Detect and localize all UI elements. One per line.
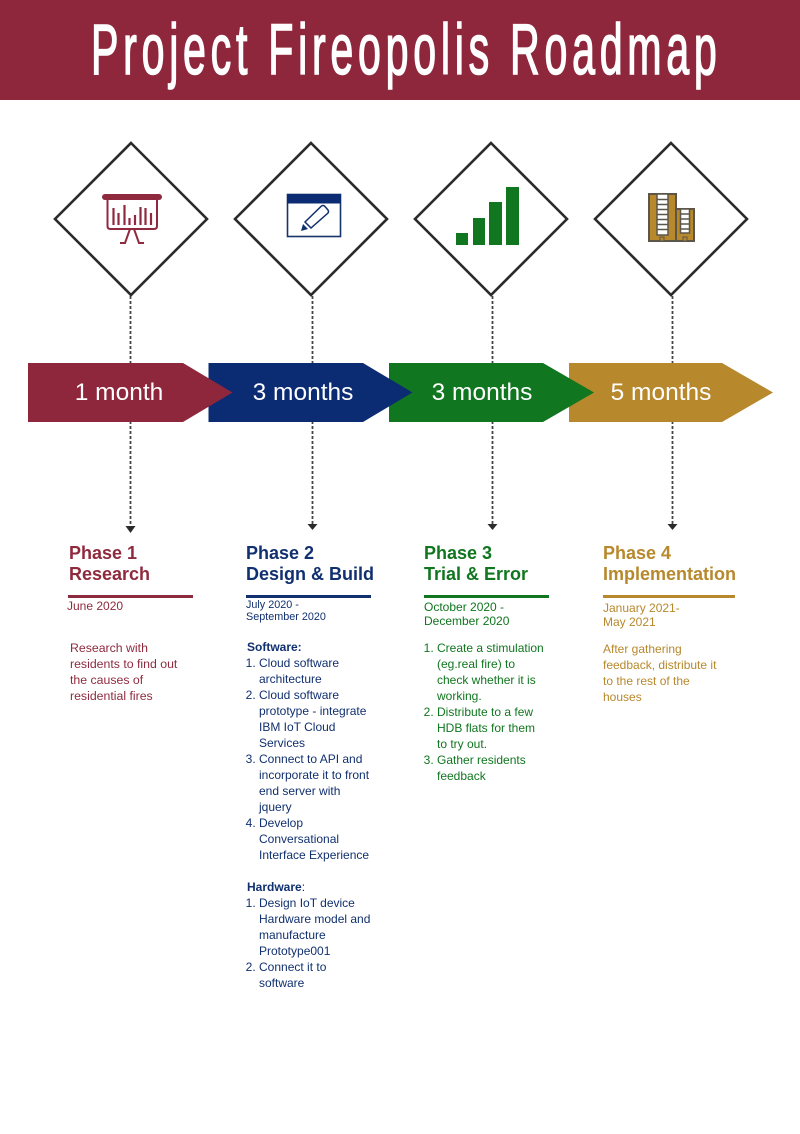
date: phase 1: June 2020 bbox=[67, 599, 123, 613]
body: phase 3: HDB flats for them bbox=[437, 721, 535, 735]
body: phase 2: Design IoT device bbox=[259, 896, 355, 910]
heading: phase 3: Phase 3 bbox=[424, 543, 492, 563]
date: phase 2: September 2020 bbox=[246, 611, 326, 623]
body: phase 3: Distribute to a few bbox=[437, 705, 533, 719]
date: phase 4: January 2021- bbox=[603, 601, 680, 615]
diamond: phase 4 bbox=[595, 143, 747, 295]
arrow: 1 month bbox=[28, 363, 232, 422]
body: phase 2: incorporate it to front bbox=[259, 768, 369, 782]
heading: phase 2 bbox=[246, 543, 374, 584]
body: phase 4: After gathering bbox=[603, 642, 682, 656]
body: phase 2: Connect to API and bbox=[259, 752, 362, 766]
body: phase 3: (eg.real fire) to bbox=[437, 657, 515, 671]
body: phase 2: Develop bbox=[259, 816, 303, 830]
body: phase 2: Cloud software bbox=[259, 656, 339, 670]
arrow: 3 months phase 2: 3 months bbox=[253, 379, 353, 406]
icon: buildings bbox=[649, 194, 694, 241]
body: phase 2: Services bbox=[259, 736, 305, 750]
icon: window with pencil bbox=[287, 194, 341, 236]
icon: rising bars bbox=[456, 187, 519, 245]
body: phase 2: manufacture bbox=[259, 928, 326, 942]
body: phase 2: prototype - integrate bbox=[259, 704, 366, 718]
arrowheads on connectors bbox=[126, 524, 678, 533]
body: phase 1: the causes of bbox=[70, 672, 143, 686]
date: phase 3: October 2020 - bbox=[424, 600, 504, 614]
date: phase 2: July 2020 - bbox=[246, 599, 299, 611]
body: phase 2: Prototype001 bbox=[259, 944, 330, 958]
heading: phase 1: Phase 1 bbox=[69, 543, 137, 563]
date: phase 4 bbox=[603, 601, 680, 629]
date: phase 3: December 2020 bbox=[424, 614, 509, 628]
rule: phase 1 bbox=[68, 595, 193, 598]
body: phase 2: Connect it to bbox=[259, 960, 326, 974]
body: phase 3: feedback bbox=[437, 769, 486, 783]
body: phase 1: residents to find out bbox=[70, 656, 177, 670]
body: phase 2: Software: bbox=[247, 640, 302, 654]
rule: phase 3 bbox=[424, 595, 549, 598]
body: phase 2: Hardware model and bbox=[259, 912, 370, 926]
heading: phase 3: Trial & Error bbox=[424, 564, 528, 584]
body: phase 3: Gather residents bbox=[437, 753, 526, 767]
heading: phase 1: Research bbox=[69, 564, 150, 584]
body: phase 1 bbox=[70, 640, 178, 702]
icon: presentation board bbox=[102, 194, 162, 243]
arrow: 5 months: 5 months bbox=[611, 379, 711, 406]
heading: phase 4: Implementation bbox=[603, 564, 736, 584]
body: phase 1: Research with bbox=[70, 640, 148, 654]
body: phase 2: software bbox=[259, 976, 304, 990]
date: phase 4: May 2021 bbox=[603, 615, 656, 629]
diamond: phase 3 bbox=[415, 143, 567, 295]
body: phase 2 bbox=[246, 640, 370, 990]
diamond: phase 2 bbox=[235, 143, 387, 295]
body: phase 2: Hardware: bbox=[247, 880, 305, 894]
arrow: 3 months phase 2 bbox=[208, 363, 412, 422]
heading: phase 4: Phase 4 bbox=[603, 543, 671, 563]
body: phase 2: end server with bbox=[259, 784, 340, 798]
body: phase 4 bbox=[603, 642, 716, 704]
heading: phase 4 bbox=[603, 543, 736, 584]
body: phase 3: working. bbox=[437, 689, 482, 703]
heading: phase 2: Phase 2 bbox=[246, 543, 314, 563]
arrow: 5 months bbox=[569, 363, 773, 422]
body: phase 3: check whether it is bbox=[437, 673, 536, 687]
body: phase 3 bbox=[424, 641, 544, 783]
body: phase 2: IBM IoT Cloud bbox=[259, 720, 335, 734]
body: phase 1: residential fires bbox=[70, 688, 153, 702]
body: phase 3: Create a stimulation bbox=[437, 641, 544, 655]
body: phase 2: Interface Experience bbox=[259, 848, 369, 862]
heading: phase 1 bbox=[69, 543, 150, 584]
arrow: 1 month: 1 month bbox=[75, 379, 163, 406]
dashed connector lines bbox=[130, 296, 672, 525]
body: phase 2: architecture bbox=[259, 672, 322, 686]
body: phase 3: to try out. bbox=[437, 737, 487, 751]
rule: phase 4 bbox=[603, 595, 735, 598]
title: Project Fireopolis Roadmap bbox=[91, 10, 717, 90]
date: phase 2 bbox=[246, 599, 326, 623]
heading: phase 2: Design & Build bbox=[246, 564, 374, 584]
body: phase 2: Conversational bbox=[259, 832, 339, 846]
body: phase 4: houses bbox=[603, 690, 642, 704]
diamond: phase 1 bbox=[55, 143, 207, 295]
rule: phase 2 bbox=[246, 595, 371, 598]
date: phase 3 bbox=[424, 600, 509, 628]
body: phase 4: to the rest of the bbox=[603, 674, 690, 688]
body: phase 2: jquery bbox=[259, 800, 292, 814]
body: phase 4: feedback, distribute it bbox=[603, 658, 716, 672]
body: phase 2: Cloud software bbox=[259, 688, 339, 702]
heading: phase 3 bbox=[424, 543, 528, 584]
arrow: 3 months phase 3: 3 months bbox=[432, 379, 532, 406]
arrow: 3 months phase 3 bbox=[389, 363, 594, 422]
